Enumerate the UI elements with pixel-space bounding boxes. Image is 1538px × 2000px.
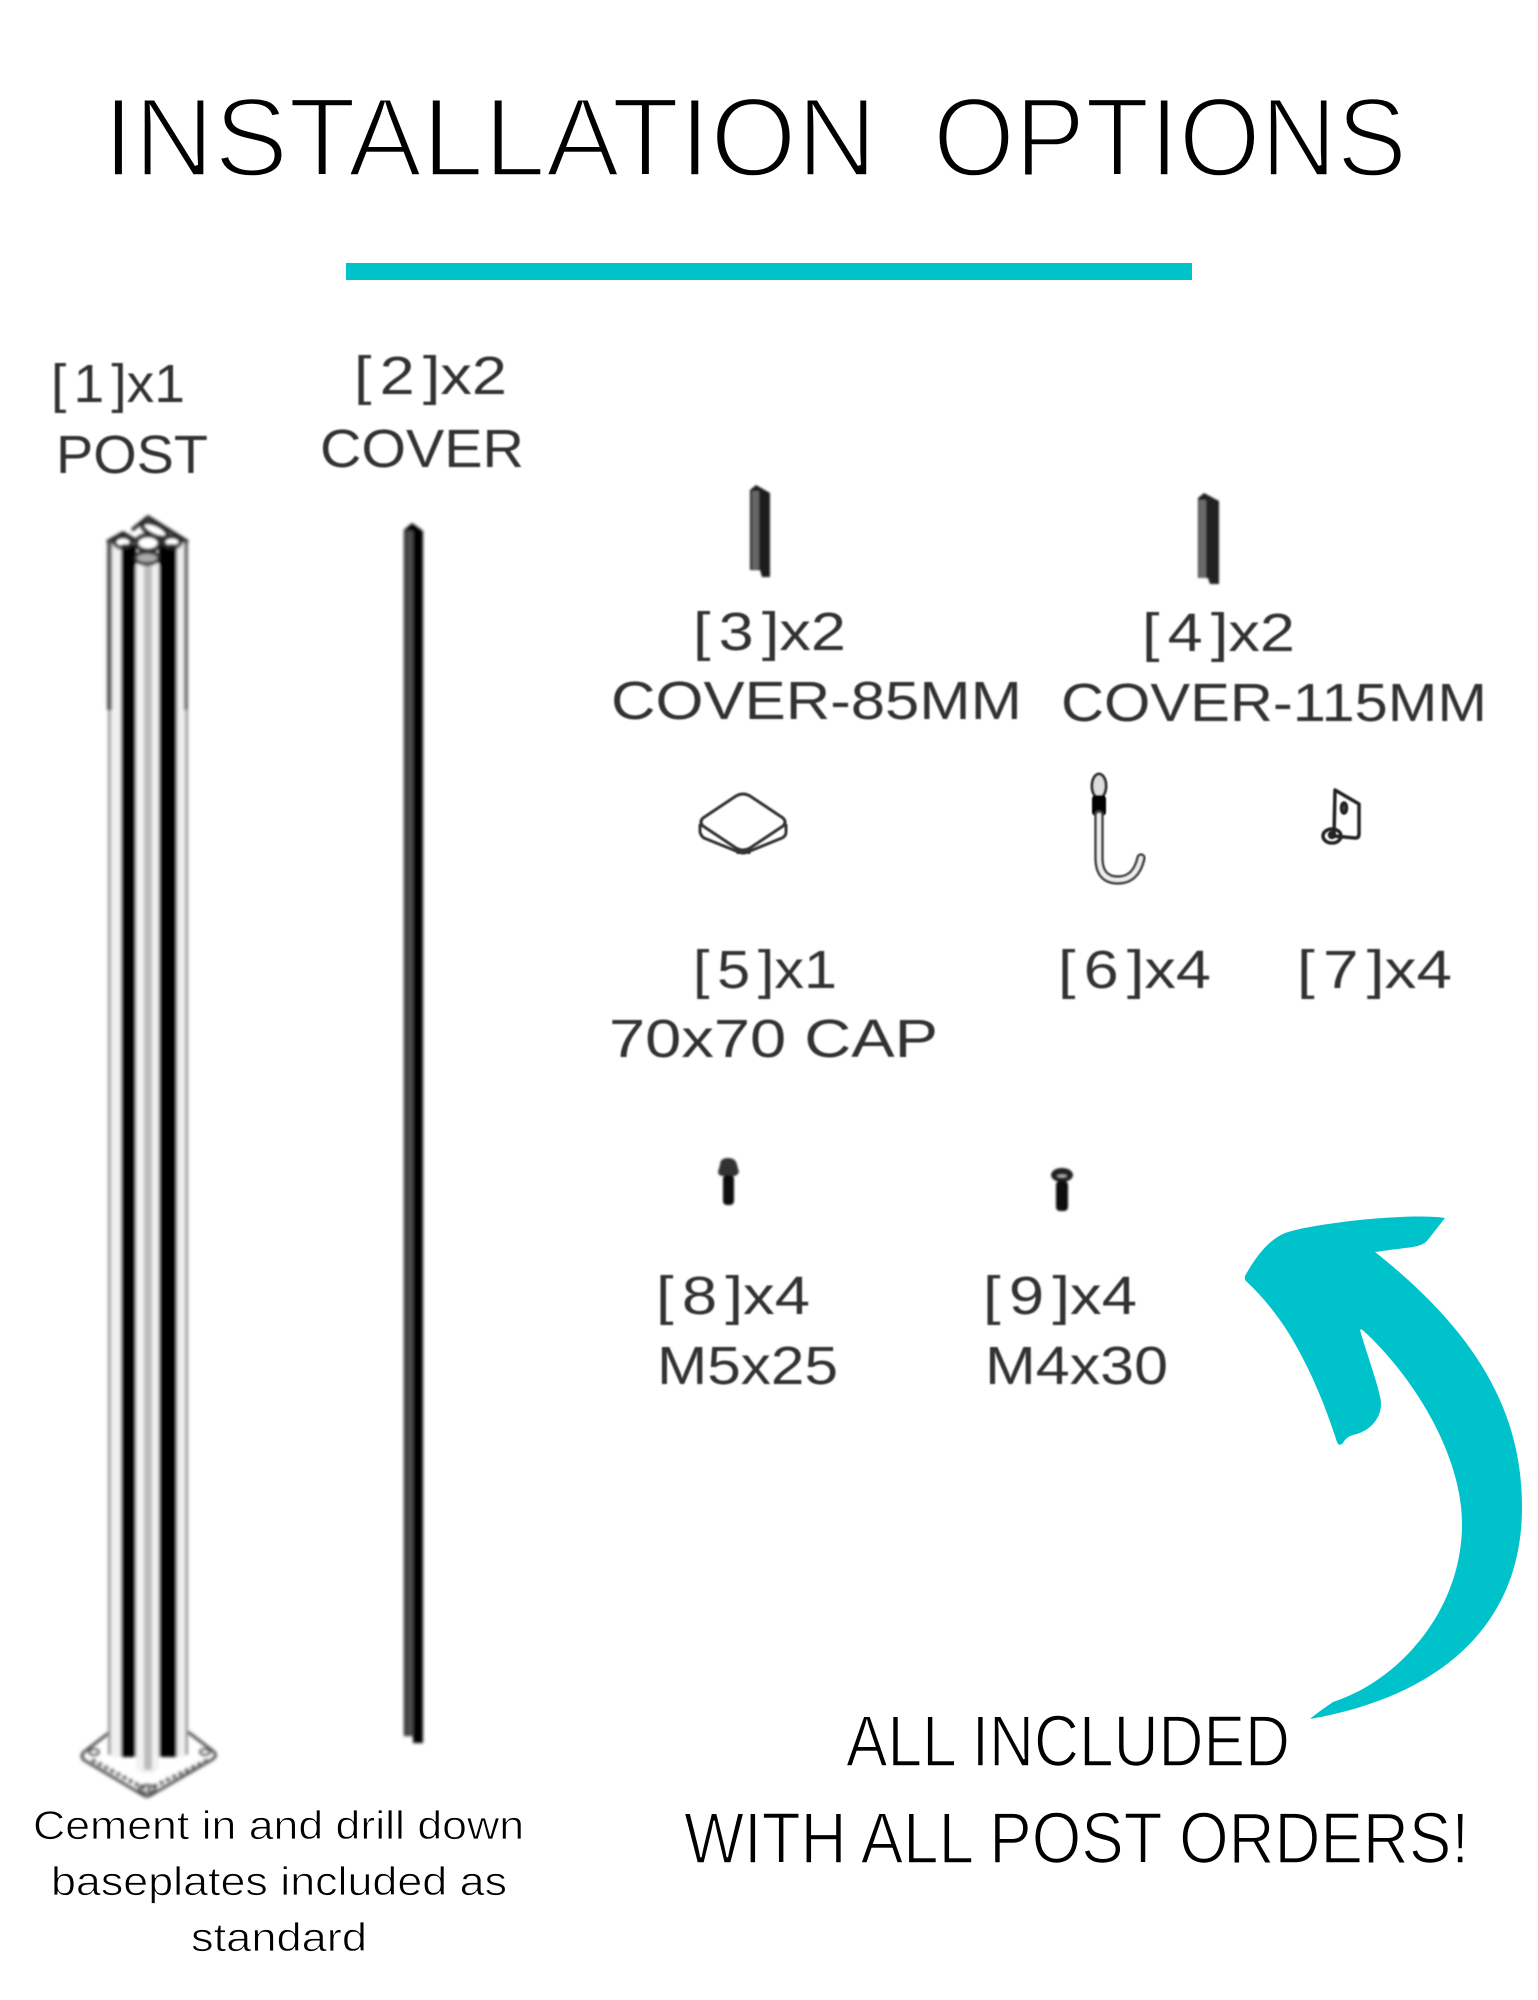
arrow: teal curved arrow [1245,1217,1522,1719]
part label: [1] post: [1]x1 [51,354,185,414]
part label: [6]: [6]x4 [1058,940,1211,1000]
icon: post with baseplate [82,517,216,1796]
title: OPTIONS [933,75,1407,200]
icon: 115mm cover [1198,493,1219,584]
caption: baseplates note: standard [191,1916,367,1960]
part label: [8]: M5x25 [657,1336,838,1396]
caption: baseplates note: baseplates included as [51,1860,507,1904]
part label: [3] cover 85mm: [3]x2 [693,602,846,662]
post top profile [107,517,188,564]
post body stripes [107,542,112,710]
part label: [9]: M4x30 [985,1336,1168,1396]
part label: [5] cap [609,940,938,1069]
part label: [5] cap: [5]x1 [693,940,837,1000]
icon: M4x30 screw [1051,1168,1073,1211]
icon: J hook bolt [1092,774,1141,880]
part label: [8] [656,1266,838,1396]
part label: [2] cover: [2]x2 [354,346,507,406]
baseplate [82,1732,216,1796]
caption: baseplates note [33,1804,524,1960]
callout: all included: ALL INCLUDED [846,1702,1290,1782]
part label: [9]: [9]x4 [983,1266,1137,1326]
icon: long cover strip [404,523,423,1743]
callout: all included [684,1702,1469,1879]
part label: [5] cap: 70x70 CAP [609,1009,938,1069]
part label: [2] cover [320,346,524,479]
part label: [3] cover 85mm: COVER-85MM [611,671,1022,731]
teal divider bar [346,263,1192,280]
icon: M5x25 screw [718,1158,739,1205]
caption: baseplates note: Cement in and drill down [33,1804,524,1848]
part label: [2] cover: COVER [320,419,524,479]
part label: [1] post [51,354,208,485]
part label: [3] cover 85mm [611,602,1022,731]
part label: [4] cover 115mm [1061,603,1487,733]
icon: angle bracket [1323,790,1359,843]
title: INSTALLATION [103,75,877,200]
part label: [8]: [8]x4 [656,1266,810,1326]
icon: post cap [700,794,786,854]
part label: [9] [983,1266,1168,1396]
icon: 85mm cover [750,485,770,577]
part label: [4] cover 115mm: [4]x2 [1142,603,1295,663]
part label: [1] post: POST [56,425,208,485]
part label: [7]: [7 ]x4 [1297,940,1452,1000]
title [103,75,1407,200]
part label: [4] cover 115mm: COVER-115MM [1061,673,1487,733]
